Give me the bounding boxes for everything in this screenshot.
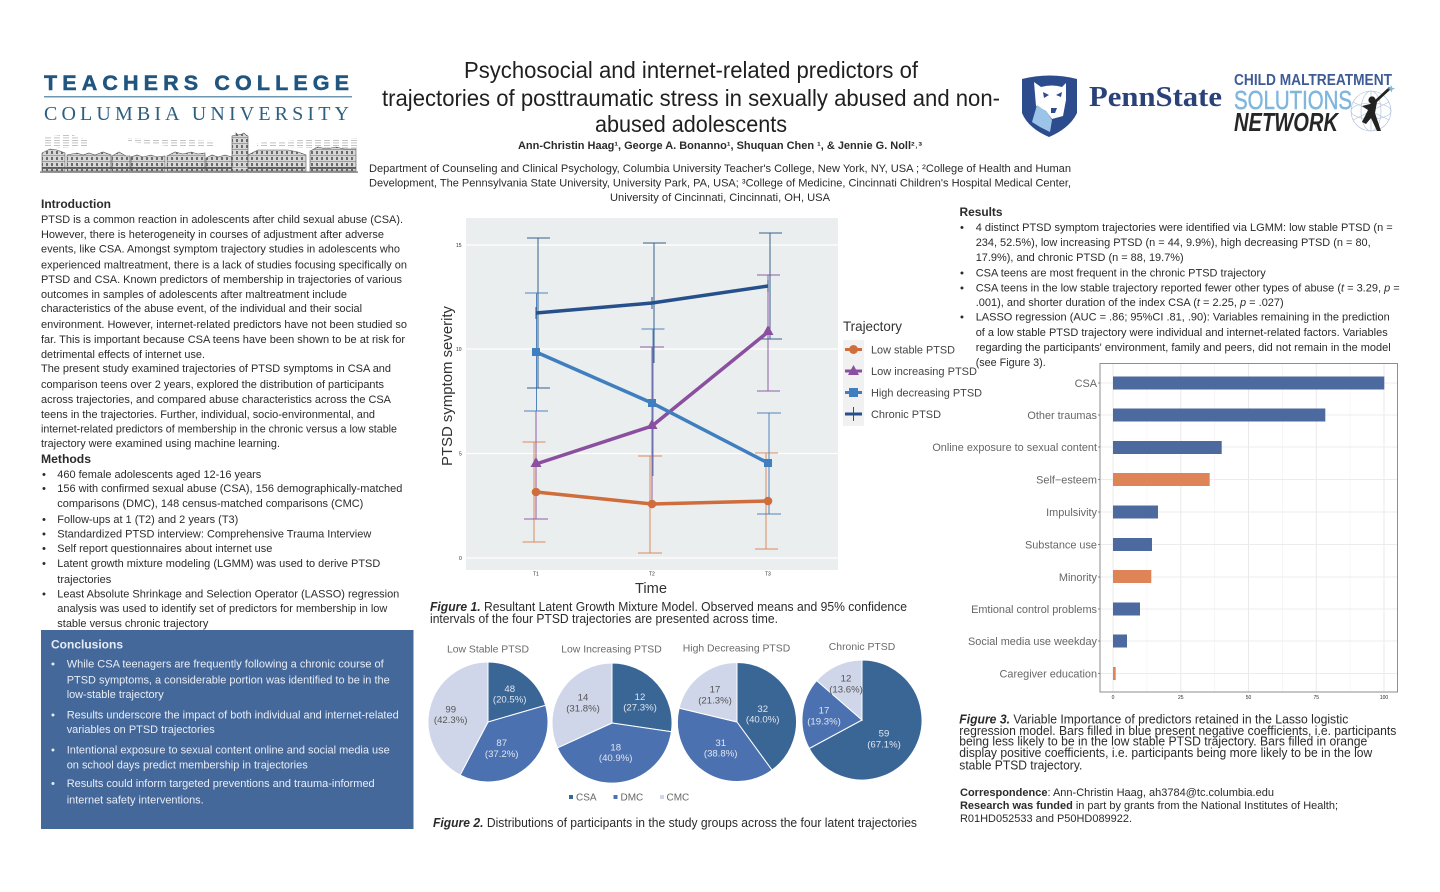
pie: high decreasing PTSD: 31 bbox=[715, 738, 726, 749]
text block: results bullets: of a low stable PTSD trajectory were individual and internet-related factors. Variables bbox=[976, 327, 1388, 339]
text block: introduction body: PTSD is a common reaction in adolescents after child sexual abuse (CSA). bbox=[41, 214, 403, 226]
y axis ticks: T3 bbox=[765, 572, 771, 578]
bars bbox=[1113, 376, 1384, 680]
text block: introduction body: trajectory were examined using machine learning. bbox=[41, 438, 280, 450]
y axis ticks: 15 bbox=[456, 243, 462, 249]
authors: Ann-Christin Haag¹, George A. Bonanno¹, Shuquan Chen ¹, & Jennie G. Noll²˒³ bbox=[518, 140, 922, 152]
text block: methods bullets: stable versus chronic trajectory bbox=[57, 618, 209, 630]
logo: Penn State: PennState bbox=[1089, 81, 1222, 113]
logo: Child Maltreatment Solutions Network bbox=[1234, 72, 1396, 137]
pie: high decreasing PTSD: (21.3%) bbox=[698, 696, 732, 707]
pie: low increasing PTSD: (31.8%) bbox=[566, 703, 600, 714]
logo: Child Maltreatment Solutions Network: NETWORK bbox=[1234, 107, 1340, 137]
chart: variable importance bar chart bbox=[932, 364, 1398, 701]
text block: methods bullets bbox=[42, 469, 402, 630]
bar labels: Impulsivity bbox=[1046, 507, 1098, 519]
icon: shield bbox=[1022, 76, 1077, 137]
text block: introduction body: However, there is heterogeneity in courses of adjustment after adverse bbox=[41, 229, 384, 241]
text block: conclusions bullets: low-stable trajectory bbox=[67, 689, 164, 701]
text block: methods bullets: comparisons (DMC), 148 census-matched comparisons (CMC) bbox=[57, 498, 364, 510]
bar labels: Other traumas bbox=[1027, 410, 1098, 422]
text block: conclusions bullets: Results could inform targeted preventions and trauma-informed bbox=[67, 778, 375, 790]
bar labels: Minority bbox=[1059, 572, 1098, 584]
bar labels: Caregiver education bbox=[1000, 668, 1097, 680]
heading: conclusions: Conclusions bbox=[51, 638, 123, 652]
pie: low increasing PTSD: (40.9%) bbox=[599, 753, 632, 764]
text block: results bullets: 17.9%), and chronic PTSD (n = 88, 19.7%) bbox=[976, 252, 1184, 264]
legend item: high decreasing: High decreasing PTSD bbox=[871, 388, 982, 400]
text block: methods bullets: • bbox=[42, 469, 46, 481]
text block: methods bullets: trajectories bbox=[57, 574, 112, 586]
y axis ticks: T1 bbox=[533, 572, 539, 578]
series: high decreasing PTSD bbox=[532, 348, 772, 467]
logo: Child Maltreatment Solutions Network: SOLUTIONS bbox=[1234, 85, 1352, 115]
figure 3 caption: regression model. Bars filled in blue present negative coefficients, i.e. participants bbox=[959, 724, 1396, 738]
text block: results bullets bbox=[960, 222, 1400, 369]
text block: introduction body: across trajectories, and compared abuse characteristics across the CSA bbox=[41, 394, 392, 406]
x axis ticks: 25 bbox=[1178, 695, 1184, 701]
chart: pie charts bbox=[428, 642, 922, 803]
figure 1 caption: intervals of the four PTSD trajectories are presented across time. bbox=[430, 612, 778, 626]
pie: low increasing PTSD bbox=[552, 644, 672, 783]
pie: high decreasing PTSD: 17 bbox=[710, 685, 720, 696]
pie: low increasing PTSD: 12 bbox=[635, 692, 645, 703]
y axis ticks: 10 bbox=[456, 347, 462, 353]
legend item: low stable: Low stable PTSD bbox=[871, 344, 955, 356]
x axis ticks: 75 bbox=[1314, 695, 1319, 701]
figure 2 caption: Figure 2. Distributions of participants in the study groups across the four latent trajectories bbox=[433, 816, 917, 830]
y axis ticks: T2 bbox=[649, 572, 655, 578]
pie: chronic PTSD: 17 bbox=[819, 706, 829, 717]
text block: conclusions bullets: internet safety interventions. bbox=[67, 794, 204, 806]
legend item: low increasing: Low increasing PTSD bbox=[871, 366, 977, 378]
correspondence and funding: Correspondence: Ann-Christin Haag, ah3784@tc.columbia.edu bbox=[960, 787, 1274, 799]
pie: chronic PTSD bbox=[802, 642, 922, 780]
legend item: chronic: Chronic PTSD bbox=[871, 409, 941, 421]
text block: conclusions bullets: PTSD symptoms, a considerable portion was identified to be in the bbox=[67, 674, 390, 686]
figure 3 caption: being less likely to be in the low stable PTSD trajectory. Bars filled in orange bbox=[959, 735, 1367, 749]
text block: results bullets: 4 distinct PTSD symptom trajectories were identified via LGMM: low stable PTSD (n = bbox=[976, 222, 1393, 234]
text block: introduction body: far. This is important because CSA teens have been shown to be at risk for bbox=[41, 334, 405, 346]
pie: low stable PTSD: 87 bbox=[496, 738, 507, 749]
text block: introduction body: detrimental effects of internet use. bbox=[41, 349, 205, 361]
title: trajectories of posttraumatic stress in sexually abused and non- bbox=[382, 85, 1000, 111]
pie: high decreasing PTSD: (40.0%) bbox=[746, 715, 779, 726]
x axis ticks bbox=[1112, 695, 1388, 701]
text block: conclusions bullets: • bbox=[51, 658, 55, 670]
text block: results bullets: • bbox=[960, 222, 964, 234]
bar labels: Substance use bbox=[1025, 539, 1097, 551]
pie: chronic PTSD: (13.6%) bbox=[829, 685, 863, 696]
correspondence and funding: Research was funded in part by grants from the National Institutes of Health; bbox=[960, 800, 1338, 812]
panel: results bbox=[960, 205, 1400, 369]
pie: low increasing PTSD: 14 bbox=[578, 693, 589, 704]
text block: methods bullets: • bbox=[42, 558, 46, 570]
text block: methods bullets: analysis was used to identify set of predictors for membership in low bbox=[57, 603, 388, 615]
logo: Penn State bbox=[1022, 76, 1222, 137]
logo: Teachers College Columbia University bbox=[40, 71, 358, 173]
x axis ticks: 50 bbox=[1246, 695, 1251, 701]
series: low increasing PTSD bbox=[530, 325, 774, 467]
pie: low increasing PTSD: 18 bbox=[610, 742, 621, 754]
affiliations: Development, The Pennsylvania State University, University Park, PA, USA; ³College of Medicine, Cincinnati Children's Hospital Medical Center, bbox=[369, 178, 1071, 190]
text block: conclusions bullets: • bbox=[51, 778, 55, 790]
pie: low stable PTSD bbox=[428, 644, 548, 782]
heading: introduction: Introduction bbox=[41, 197, 111, 211]
affiliations bbox=[369, 163, 1071, 204]
logo: Child Maltreatment Solutions Network: CHILD MALTREATMENT bbox=[1234, 72, 1392, 89]
correspondence and funding bbox=[960, 787, 1338, 825]
pie: low increasing PTSD: Low Increasing PTSD bbox=[561, 644, 662, 656]
figure 3 caption: Figure 3. Variable Importance of predictors retained in the Lasso logistic bbox=[959, 712, 1348, 726]
legend: trajectory: Trajectory bbox=[843, 318, 902, 334]
pie: high decreasing PTSD: High Decreasing PTSD bbox=[683, 644, 790, 654]
pie: chronic PTSD: 12 bbox=[841, 674, 851, 685]
panel: conclusions bbox=[41, 630, 414, 829]
text block: results bullets: 234, 52.5%), low increasing PTSD (n = 44, 9.9%), high decreasing PTSD (n = 80, bbox=[976, 237, 1371, 249]
axis label: y: PTSD symptom severity bbox=[440, 305, 456, 466]
pie: low stable PTSD: Low Stable PTSD bbox=[447, 644, 529, 656]
logo: Teachers College Columbia University: TEACHERS COLLEGE bbox=[44, 71, 349, 95]
affiliations: University of Cincinnati, Cincinnati, OH, USA bbox=[610, 192, 831, 204]
heading: results: Results bbox=[960, 205, 1003, 219]
text block: results bullets: • bbox=[960, 282, 964, 294]
pie: low increasing PTSD: (27.3%) bbox=[623, 703, 657, 714]
pie: chronic PTSD: (19.3%) bbox=[807, 716, 841, 727]
legend: study groups bbox=[569, 792, 689, 803]
pie: low stable PTSD: 99 bbox=[445, 704, 456, 716]
text block: results bullets: CSA teens in the low stable trajectory reported fewer other types of abuse (t = 3.29, p = bbox=[976, 282, 1400, 294]
text block: conclusions bullets bbox=[51, 658, 399, 806]
title: Psychosocial and internet-related predictors of bbox=[464, 57, 919, 83]
text block: conclusions bullets: Results underscore the impact of both individual and internet-related bbox=[67, 710, 399, 722]
y axis ticks bbox=[456, 243, 771, 578]
affiliations: Department of Counseling and Clinical Psychology, Columbia University Teacher's College, New York, NY, USA ; ²College of Health and Human bbox=[369, 163, 1071, 175]
text block: results bullets: (see Figure 3). bbox=[976, 357, 1046, 369]
x axis ticks: 100 bbox=[1380, 695, 1388, 701]
figure 3 caption: display positive coefficients, i.e. participants being more likely to be in the low bbox=[959, 746, 1373, 760]
text block: methods bullets: Standardized PTSD interview: Comprehensive Trauma Interview bbox=[57, 528, 372, 540]
text block: introduction body: events, like CSA. Amongst symptom trajectory studies in adolescents who bbox=[41, 243, 400, 255]
text block: introduction body: comparison teens over 2 years, explored the distribution of participants bbox=[41, 379, 384, 391]
text block: introduction body: internet-related predictors of membership in the chronic versus a low stable bbox=[41, 424, 397, 436]
text block: results bullets: CSA teens are most frequent in the chronic PTSD trajectory bbox=[976, 268, 1266, 280]
figure 1 caption bbox=[430, 600, 907, 626]
legend: study groups: CMC bbox=[666, 792, 689, 803]
axis label: x: Time bbox=[635, 580, 667, 597]
text block: methods bullets: • bbox=[42, 483, 46, 495]
heading: methods: Methods bbox=[41, 452, 91, 466]
text block: introduction body: The present study examined trajectories of PTSD symptoms in CSA and bbox=[41, 363, 391, 375]
icon: figure on globe bbox=[1351, 85, 1396, 131]
text block: conclusions bullets: • bbox=[51, 744, 55, 756]
text block: methods bullets: • bbox=[42, 588, 46, 600]
text block: introduction body: environment. However, internet-related predictors have not been studied so bbox=[41, 319, 407, 331]
x axis ticks: 0 bbox=[1112, 695, 1115, 701]
legend: study groups: DMC bbox=[620, 792, 643, 803]
text block: introduction body: experienced maltreatment, there is a lack of studies focusing specifically on bbox=[41, 260, 407, 272]
text block: conclusions bullets: • bbox=[51, 710, 55, 722]
text block: introduction body: outcomes in samples of adolescents after maltreatment include bbox=[41, 289, 347, 301]
text block: methods bullets: • bbox=[42, 528, 46, 540]
text block: results bullets: LASSO regression (AUC = .86; 95%CI .81, .90): Variables remaining in the prediction bbox=[976, 312, 1390, 324]
legend: study groups: CSA bbox=[576, 792, 597, 803]
series: chronic PTSD bbox=[536, 280, 768, 319]
figure 1 caption: Figure 1. Resultant Latent Growth Mixture Model. Observed means and 95% confidence bbox=[430, 600, 907, 614]
error bars bbox=[522, 233, 782, 553]
y axis ticks: 0 bbox=[459, 556, 462, 562]
logo: Teachers College Columbia University: COLUMBIA UNIVERSITY bbox=[44, 103, 349, 125]
pie: low stable PTSD: (42.3%) bbox=[434, 715, 467, 726]
pie: high decreasing PTSD: (38.8%) bbox=[704, 749, 737, 760]
bar labels: Social media use weekday bbox=[968, 636, 1098, 648]
text block: results bullets: • bbox=[960, 312, 964, 324]
y axis ticks: 5 bbox=[459, 452, 462, 458]
bar labels bbox=[932, 378, 1098, 680]
pie: high decreasing PTSD: 32 bbox=[757, 704, 768, 715]
text block: results bullets: • bbox=[960, 268, 964, 280]
pie: low stable PTSD: (37.2%) bbox=[485, 749, 518, 760]
figure 3 caption bbox=[959, 712, 1396, 772]
text block: methods bullets: Self report questionnaires about internet use bbox=[57, 543, 272, 555]
text block: introduction body bbox=[41, 214, 407, 450]
text block: methods bullets: • bbox=[42, 514, 46, 526]
text block: methods bullets: Follow-ups at 1 (T2) and 2 years (T3) bbox=[57, 514, 239, 526]
text block: conclusions bullets: Intentional exposure to sexual content online and social media use bbox=[67, 744, 390, 756]
text block: introduction body: characteristics of the abuse event, of the individual and their social bbox=[41, 303, 362, 315]
title bbox=[382, 57, 1000, 137]
bar labels: CSA bbox=[1075, 378, 1098, 390]
pie: low stable PTSD: (20.5%) bbox=[493, 695, 526, 706]
bar labels: Emtional control problems bbox=[971, 604, 1098, 616]
text block: results bullets: regarding the participants' environment, family and peers, did not remain in the model bbox=[976, 342, 1391, 354]
pie: high decreasing PTSD bbox=[677, 644, 796, 782]
chart: PTSD trajectories line chart bbox=[440, 218, 838, 597]
text block: introduction body: teens in the trajectories. Further, individual, socio-environmental, and bbox=[41, 409, 375, 421]
bar labels: Self−esteem bbox=[1036, 474, 1097, 486]
text block: methods bullets: Least Absolute Shrinkage and Selection Operator (LASSO) regression bbox=[57, 588, 399, 600]
series: low stable PTSD bbox=[532, 488, 772, 508]
text block: methods bullets: • bbox=[42, 543, 46, 555]
figure 3 caption: stable PTSD trajectory. bbox=[959, 758, 1082, 772]
text block: introduction body: PTSD and CSA. Known predictors of membership in trajectories of various bbox=[41, 274, 402, 286]
pie: chronic PTSD: (67.1%) bbox=[867, 739, 901, 750]
correspondence and funding: R01HD052533 and P50HD089922. bbox=[960, 813, 1132, 825]
text block: results bullets: .001), and shorter duration of the index CSA (t = 2.25, p = .027) bbox=[976, 297, 1284, 309]
text block: methods bullets: 156 with confirmed sexual abuse (CSA), 156 demographically-matched bbox=[57, 483, 402, 495]
text block: methods bullets: 460 female adolescents aged 12-16 years bbox=[57, 469, 262, 481]
pie: low stable PTSD: 48 bbox=[504, 684, 515, 695]
pie: chronic PTSD: 59 bbox=[879, 729, 889, 740]
bar labels: Online exposure to sexual content bbox=[932, 442, 1097, 454]
text block: conclusions bullets: While CSA teenagers are frequently following a chronic course of bbox=[67, 658, 385, 670]
panel: methods bbox=[41, 452, 402, 630]
text block: conclusions bullets: variables on PTSD trajectories bbox=[67, 724, 215, 736]
text block: methods bullets: Latent growth mixture modeling (LGMM) was used to derive PTSD bbox=[57, 558, 380, 570]
text block: conclusions bullets: on school days predict membership in trajectories bbox=[67, 760, 308, 772]
panel: introduction bbox=[41, 197, 407, 450]
title: abused adolescents bbox=[595, 111, 787, 137]
legend: trajectory bbox=[843, 318, 982, 426]
pie: chronic PTSD: Chronic PTSD bbox=[829, 642, 895, 653]
